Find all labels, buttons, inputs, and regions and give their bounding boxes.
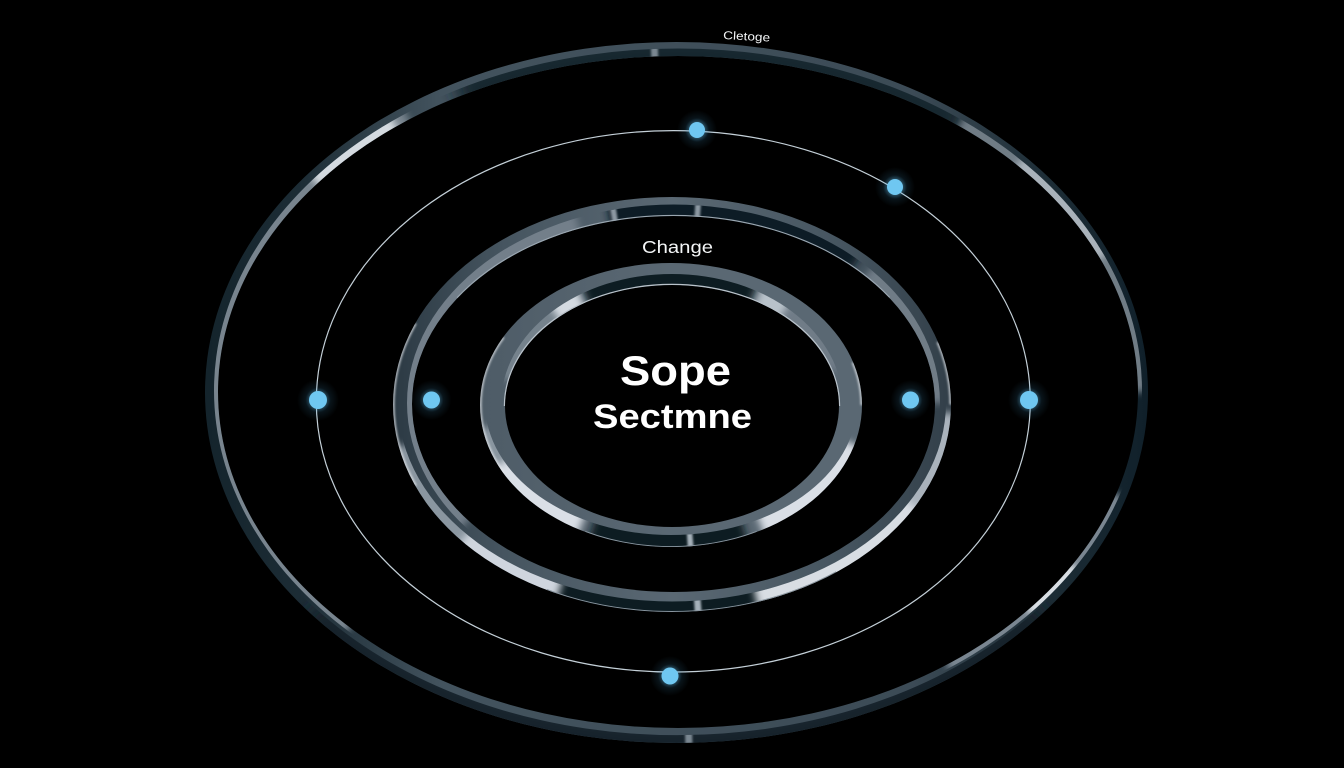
thin orbit line xyxy=(316,131,1030,672)
inner metallic ring xyxy=(476,258,866,552)
node: far left xyxy=(297,379,339,421)
node: upper right xyxy=(875,167,915,207)
label: middle ring: Change xyxy=(642,237,713,257)
node: top xyxy=(677,110,717,150)
middle metallic ring xyxy=(388,190,956,618)
node: far right xyxy=(1008,379,1050,421)
label: outer ring: Cletoge xyxy=(723,30,770,44)
outer metallic ring xyxy=(200,38,1152,748)
center title: Sope xyxy=(620,347,731,394)
diagram: concentric rings xyxy=(205,31,1148,743)
node: bottom xyxy=(650,656,690,696)
center subtitle: Sectmne xyxy=(593,398,752,436)
node: near right xyxy=(890,380,930,420)
node: near left xyxy=(412,380,452,420)
